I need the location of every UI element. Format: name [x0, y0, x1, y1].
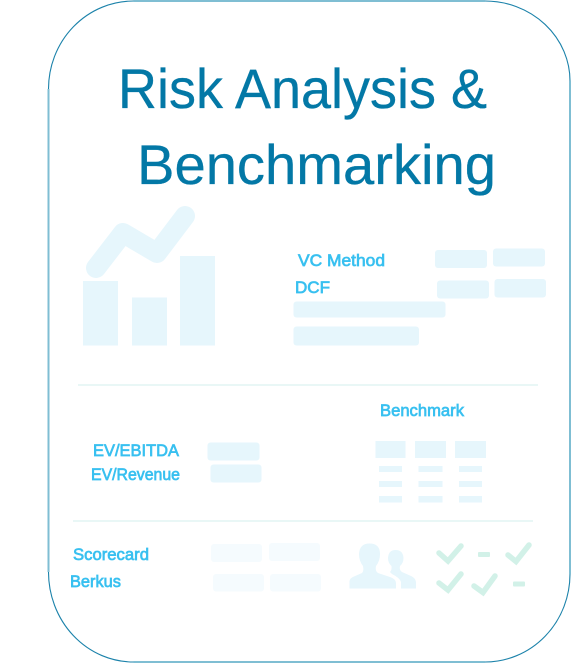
- icon: people: [350, 544, 416, 588]
- label: Berkus: Berkus: [70, 572, 121, 591]
- value placeholders: [294, 248, 546, 346]
- label: VC Method: VC Method: [298, 251, 385, 270]
- value placeholders: [208, 442, 262, 482]
- value placeholders: [211, 543, 321, 592]
- icons: check marks and dashes: [439, 545, 529, 592]
- label: Benchmark: Benchmark: [380, 401, 464, 420]
- label: EV/EBITDA: EV/EBITDA: [93, 441, 180, 460]
- label: Scorecard: Scorecard: [73, 545, 149, 564]
- table: benchmark grid: [376, 441, 486, 502]
- label: DCF: DCF: [295, 278, 330, 297]
- panel: early-stage methods: [70, 543, 321, 592]
- icon: bar chart with trend line: [83, 216, 215, 346]
- label: EV/Revenue: EV/Revenue: [91, 465, 180, 484]
- title: Benchmarking: [137, 133, 496, 196]
- title: Risk Analysis &: [118, 57, 487, 120]
- panel: multiples: [91, 441, 262, 484]
- panel: valuation methods: [294, 248, 546, 346]
- title: [118, 57, 496, 196]
